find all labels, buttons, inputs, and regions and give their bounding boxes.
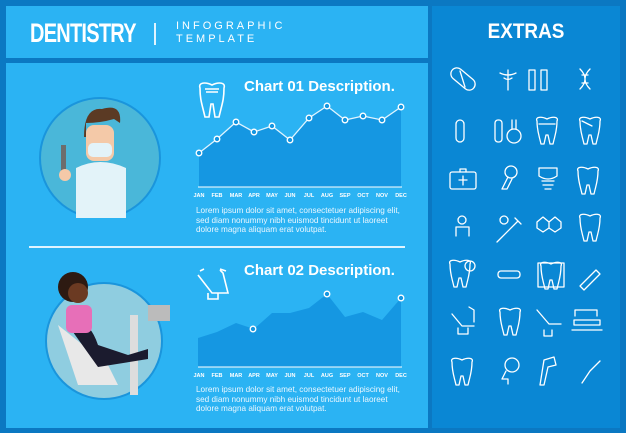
row 1 icons bbox=[448, 65, 590, 93]
chart 2 title: Chart 02 Description. bbox=[244, 262, 395, 279]
chart 2 area chart: JAN bbox=[193, 373, 205, 379]
chart 1 line chart: APR bbox=[248, 193, 260, 199]
chart 1 line chart bbox=[193, 102, 407, 199]
chart 1 line chart: AUG bbox=[321, 193, 333, 199]
doctor illustration bbox=[39, 97, 161, 218]
chart 2 text: Lorem ipsum dolor sit amet, consectetuer adipiscing elit, sed diam nonummy nibh euismod tincidunt ut laoreet dolore magna aliquam erat volutpat. bbox=[196, 385, 400, 413]
chart 2 area chart: FEB bbox=[212, 373, 223, 379]
row 7 icons bbox=[452, 357, 600, 385]
chart 2 area chart: JUL bbox=[304, 373, 315, 379]
chart 1 title: Chart 01 Description. bbox=[244, 78, 395, 95]
chart 2 area chart bbox=[193, 290, 407, 379]
divider bar bbox=[154, 23, 156, 45]
chart 1 line chart: DEC bbox=[395, 193, 407, 199]
row 3 icons bbox=[450, 166, 598, 194]
chart 1 line chart: NOV bbox=[376, 193, 388, 199]
chart 2 area chart: NOV bbox=[376, 373, 388, 379]
patient illustration bbox=[45, 272, 170, 400]
chart 1 line chart: JAN bbox=[193, 193, 205, 199]
subtitle: TEMPLATE bbox=[176, 33, 257, 45]
header panel bbox=[6, 6, 428, 58]
chart 2 area chart: DEC bbox=[395, 373, 407, 379]
row 5 icons bbox=[450, 260, 600, 290]
row 4 icons bbox=[456, 214, 600, 242]
chart 1 line chart: SEP bbox=[339, 193, 351, 199]
chart 1 line chart: FEB bbox=[212, 193, 223, 199]
chart 2 area chart: MAR bbox=[230, 373, 242, 379]
right panel: extras bbox=[432, 6, 620, 428]
row 6 icons bbox=[452, 307, 602, 336]
chart 2 chair icon bbox=[198, 268, 229, 300]
extras heading: EXTRAS bbox=[488, 20, 564, 43]
chart 1 line chart: OCT bbox=[357, 193, 369, 199]
chart 1 line chart: JUL bbox=[304, 193, 315, 199]
chart 1 tooth icon bbox=[198, 82, 226, 118]
subtitle bbox=[176, 20, 285, 45]
chart 2 area chart: OCT bbox=[357, 373, 369, 379]
subtitle: INFOGRAPHIC bbox=[176, 20, 285, 32]
chart 2 area chart: SEP bbox=[339, 373, 351, 379]
chart 2 area chart: MAY bbox=[266, 373, 278, 379]
section divider bbox=[29, 246, 405, 248]
chart 2 area chart: JUN bbox=[284, 373, 296, 379]
title: DENTISTRY bbox=[30, 18, 136, 48]
icon grid bbox=[448, 67, 603, 386]
chart 1 line chart: MAR bbox=[230, 193, 242, 199]
chart 1 line chart: JUN bbox=[284, 193, 296, 199]
chart 2 area chart: APR bbox=[248, 373, 260, 379]
row 2 icons bbox=[456, 117, 600, 144]
chart 1 text: Lorem ipsum dolor sit amet, consectetuer adipiscing elit, sed diam nonummy nibh euismod tincidunt ut laoreet dolore magna aliquam erat volutpat. bbox=[196, 206, 400, 234]
chart 1 line chart: MAY bbox=[266, 193, 278, 199]
main panel bbox=[6, 63, 428, 428]
chart 2 area chart: AUG bbox=[321, 373, 333, 379]
